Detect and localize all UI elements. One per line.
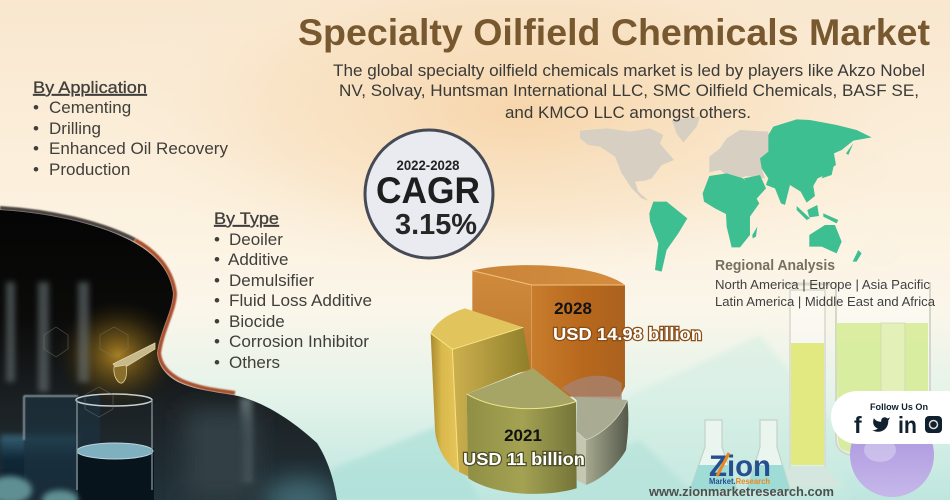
slice: grey [577,397,628,485]
photo: laboratory glassware in dark blob [0,200,340,500]
map: green regions [649,119,872,272]
list: by application: • [33,98,39,117]
pie label 2028 [553,299,702,344]
list: by type [214,209,372,372]
regional analysis: Latin America | Middle East and Africa [715,294,936,309]
intro text block: and KMCO LLC amongst others. [505,103,751,122]
intro text block [333,61,925,122]
pie label 2028: 2028 [554,299,592,318]
logo: Zion Market Research: Market.Research [709,477,770,486]
list: by application: • [33,139,39,158]
icon: instagram [925,416,942,433]
list: by application: Drilling [49,119,101,138]
regional analysis [715,258,936,309]
list: by type: Others [229,353,280,372]
pipette [113,343,155,371]
list: by type: • [214,250,220,269]
list: by type: • [214,332,220,351]
flasks: conical [690,420,790,490]
intro text block: NV, Solvay, Huntsman International LLC, SMC Oilfield Chemicals, BASF SE, [339,81,919,100]
slice: yellow [431,308,530,477]
list: by type: By Type [214,209,279,228]
regional analysis: North America | Europe | Asia Pacific [715,277,931,292]
intro text block: The global specialty oilfield chemicals market is led by players like Akzo Nobel [333,61,925,80]
icon: linkedin: in [898,412,917,438]
list: by type: • [214,271,220,290]
3D pie chart [431,265,628,494]
list: by type: Biocide [229,312,285,331]
pie label 2021 [463,426,585,469]
list: by application: Enhanced Oil Recovery [49,139,228,158]
beaker: large green [836,282,930,456]
list: by type: • [214,230,220,249]
CAGR badge: 2022-2028 [396,158,460,173]
slice: olive 2021 [467,368,577,494]
cylinder: yellow graduated [783,284,843,487]
CAGR badge: CAGR [376,170,480,211]
list: by application [33,78,228,179]
lab glassware right [690,282,934,497]
pie label 2028: USD 14.98 billion [553,324,702,344]
list: by type: Additive [228,250,288,269]
map: grey regions [580,117,768,201]
list: by type: Corrosion Inhibitor [229,332,369,351]
list: by application: By Application [33,78,147,97]
icon: twitter [872,417,890,432]
list: by application: Production [49,160,130,179]
list: by application: • [33,160,39,179]
title: Specialty Oilfield Chemicals Market [298,12,930,53]
social panel [831,391,950,444]
list: by type: • [214,312,220,331]
pie label 2021: 2021 [504,426,542,445]
flask: purple [850,413,934,497]
pie label 2021: USD 11 billion [463,449,585,469]
CAGR badge [365,130,493,258]
list: by application: • [33,119,39,138]
icon: facebook: f [854,412,862,438]
regional analysis: Regional Analysis [715,258,835,274]
list: by type: • [214,353,220,372]
social panel: Follow Us On [870,402,928,413]
logo: Zion Market Research: Zion [709,450,771,483]
slice: orange 2028 [472,265,625,400]
glass beaker back [0,432,76,480]
list: by type: • [214,291,220,310]
map: dotted backdrop [577,125,900,267]
world map [577,117,900,272]
list: by application: Cementing [49,98,131,117]
list: by type: Demulsifier [229,271,314,290]
CAGR badge: 3.15% [395,209,477,241]
website url: www.zionmarketresearch.com [648,484,834,499]
list: by type: Fluid Loss Additive [229,291,372,310]
list: by type: Deoiler [229,230,283,249]
